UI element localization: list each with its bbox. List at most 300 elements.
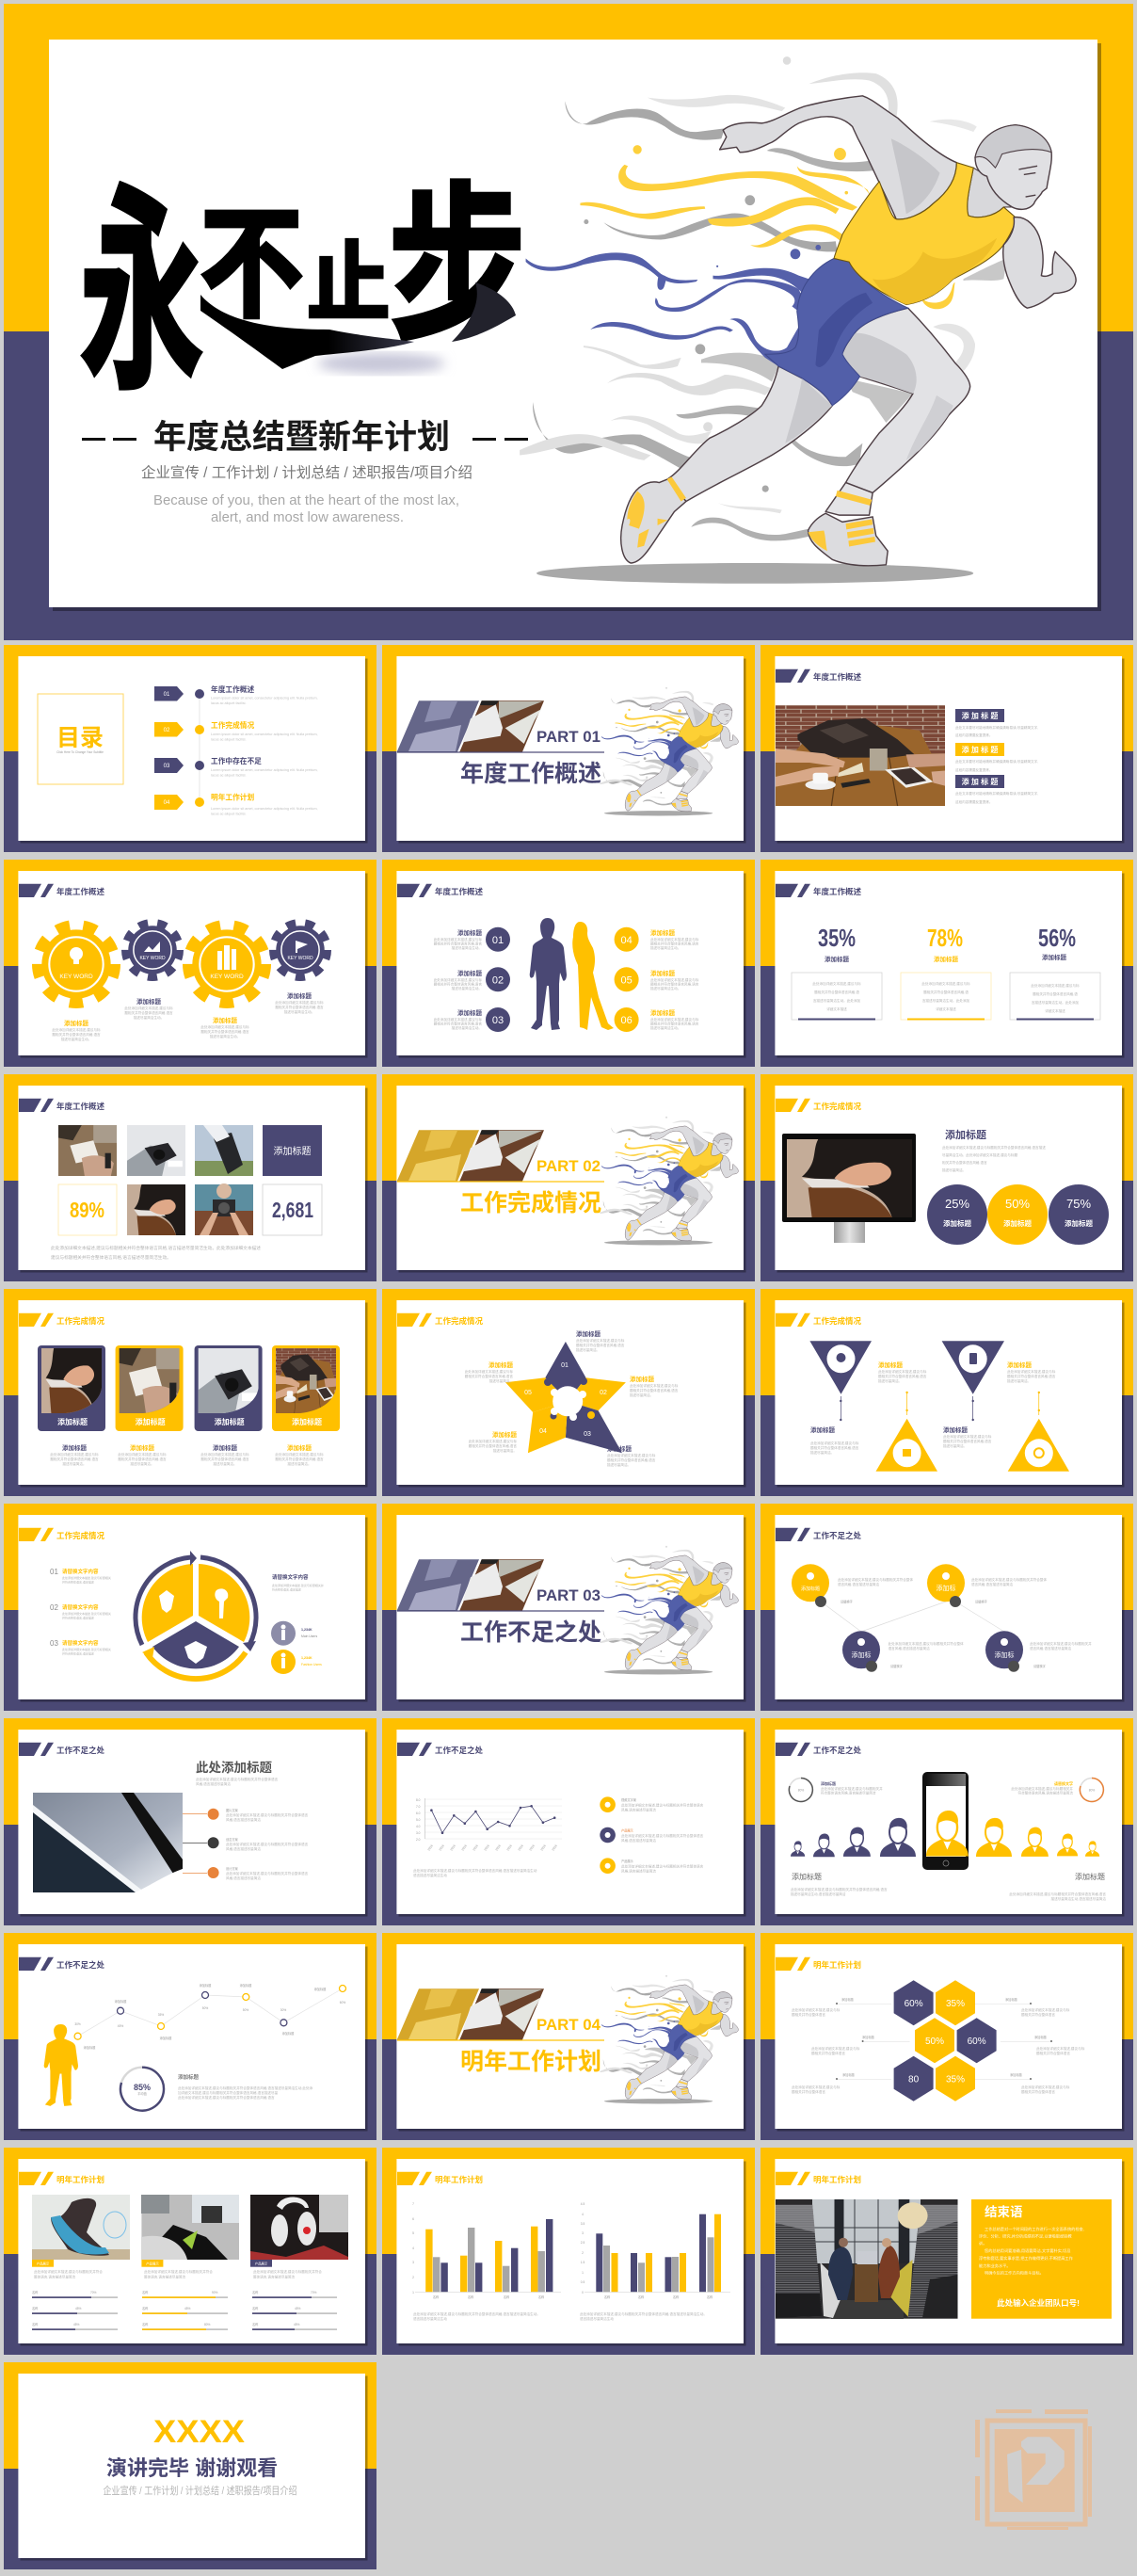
text block: 此处添加详细文本描述,建议与标题相关并符合整体语言风格,语言 <box>178 2095 275 2100</box>
text block: 添加标题 <box>178 2073 200 2081</box>
panel: table of contents <box>4 645 376 852</box>
bar chart left: 名称 <box>468 2294 474 2299</box>
stat 35%: 言描述尽量简洁生动。此处添加 <box>813 998 861 1003</box>
line chart: 4.0 <box>416 1825 421 1828</box>
chart note: 此处添加详细文本描述,建议与标题相关并符合整体语言风格,语言描述尽量简洁生动 <box>413 1868 537 1873</box>
list item 01: 请替换文字内容 <box>62 1568 99 1575</box>
photo: car interior <box>141 2195 239 2260</box>
header tag: 工作不足之处 <box>435 1746 484 1755</box>
label 1: 描述尽量简洁。 <box>576 1347 600 1352</box>
captions: 题相关并符合整体语言风格,语言 <box>118 1457 167 1461</box>
left texts: 添加标题 <box>457 1008 482 1017</box>
label 5: 此处添加详细文本描述,建议与标 <box>465 1369 513 1374</box>
connector lines <box>821 1602 1004 1632</box>
note right: 此处添加详细文本描述,建议与标题相关并符合整体语言风格,语言描述尽量简洁生动。 <box>580 2311 707 2316</box>
photo: headphones <box>250 2195 348 2260</box>
note right: 语言描述尽量简洁生动 <box>580 2316 614 2321</box>
right texts: 添加标题 <box>650 928 676 937</box>
stat: main users <box>271 1621 317 1646</box>
panel: bar charts <box>382 2148 755 2355</box>
section title: 工作完成情况 <box>460 1190 601 1216</box>
photo: sneaker <box>32 2195 130 2260</box>
item 02 <box>154 720 318 742</box>
item 1 text and bars: 产品展示 <box>37 2262 50 2265</box>
line chart: 2016 <box>540 1843 547 1852</box>
left texts: 描述尽量简洁生动。 <box>452 986 482 990</box>
icon: gear with bulb <box>39 926 114 1002</box>
label below gear 4: 题相关并符合整体语言风格,语言 <box>275 1005 324 1009</box>
gauge 85% <box>120 2068 164 2111</box>
tag block 2 <box>955 743 1038 772</box>
label yellow 1: 描述尽量简洁。 <box>878 1378 902 1383</box>
icon: gear with flag: KEY WORD <box>287 956 313 961</box>
item 2 text and bars: 45% <box>184 2307 191 2310</box>
section title: 工作不足之处 <box>460 1618 601 1646</box>
bar chart right: 4.5 <box>581 2202 585 2206</box>
bar chart right: 0.5 <box>581 2280 585 2284</box>
stat 78%: 详细文本描述 <box>936 1006 956 1011</box>
box: 89% stat: 89% <box>70 1198 104 1222</box>
body text: 此处添加详细文本描述,建议与标题相关并符合整体语言 <box>196 1777 279 1781</box>
tag block 1: 添 加 标 题 <box>962 711 998 720</box>
item 3 text and bars: 整体语言,语言描述尽量简洁 <box>253 2275 296 2278</box>
right texts: 此处添加详细文本描述,建议与标 <box>650 977 699 982</box>
tagline: 企业宣传 / 工作计划 / 计划总结 / 述职报告/项目介绍 <box>141 464 472 481</box>
label 3: 此处添加详细文本描述,建议与标 <box>607 1453 656 1457</box>
header tag: 工作完成情况 <box>435 1316 484 1326</box>
item 2 text and bars: 90% <box>212 2291 218 2294</box>
labels right: 添加标题 <box>1010 2072 1023 2077</box>
panel: hexagon cluster <box>761 1933 1133 2140</box>
panel: photo grid <box>4 1074 376 1281</box>
tag block 1 <box>955 709 1038 737</box>
item 1 text and bars: 45% <box>73 2323 80 2326</box>
stat: main users: 1,234K <box>301 1628 312 1632</box>
line chart: 2016 <box>439 1843 445 1852</box>
feature 3 <box>600 1858 704 1874</box>
node 2 <box>927 1564 1047 1607</box>
section photo <box>397 1988 604 2041</box>
header tag <box>397 2172 483 2185</box>
label navy 2: 题相关并符合整体语言风格,语言 <box>943 1439 992 1443</box>
item 04: lacus ac aliquet facilisi. <box>211 812 247 815</box>
circle 50% <box>987 1184 1048 1245</box>
list item 03: 并符合整体语言,语言描述 <box>62 1651 94 1655</box>
header tag: 工作完成情况 <box>56 1316 105 1326</box>
card 3 <box>195 1345 263 1431</box>
tag block 2: 此处文本要尽可能地精练并确保清晰易读,尽量精简文字, <box>955 759 1038 764</box>
note left: 此处添加详细文本描述,建议与标题相关并符合整体语言风格,语言描述尽量简洁生动。 <box>413 2311 540 2316</box>
label yellow 1: 此处添加详细文本描述,建议与标 <box>878 1369 927 1374</box>
tag block 2: 这段内容需要反复提炼。 <box>955 767 993 772</box>
label 5: 描述尽量简洁。 <box>489 1378 513 1383</box>
item 1 text and bars: 名称 <box>32 2290 39 2294</box>
body text: 描述尽量简洁。 <box>942 1167 966 1172</box>
chart: hexagons: 60% <box>905 1999 923 2009</box>
closing card: 您的总结用词要准确,用语要简洁,文字要朴实,切忌 <box>985 2247 1070 2254</box>
label 4: 题相关并符合整体语言风格,语言 <box>469 1443 517 1448</box>
header tag: 年度工作概述 <box>813 672 862 682</box>
label navy 2: 描述尽量简洁。 <box>943 1443 967 1448</box>
feature 2: 产品展示 <box>621 1828 633 1832</box>
item 3 text and bars: 名称 <box>252 2290 259 2294</box>
panel: products with progress bars <box>4 2148 376 2355</box>
text block: 此处添加详细文本描述,建议与标题相关并符合整体语言风格,语言描述尽量简洁生动,此处添 <box>178 2085 313 2090</box>
closing card: 评价、分析、研究,并分析成绩的不足,以便吸取经验教 <box>979 2233 1072 2239</box>
label yellow 1 <box>878 1360 927 1383</box>
card 2 <box>116 1345 184 1431</box>
chart: five piece star puzzle: 01 <box>561 1362 568 1369</box>
right texts: 此处添加详细文本描述,建议与标 <box>650 1017 699 1022</box>
item 3 text and bars <box>250 2260 337 2330</box>
panel: progress steps with man <box>4 1933 376 2140</box>
item 1 text and bars: 名称 <box>32 2322 39 2326</box>
gauge 85%: 平均值 <box>137 2091 148 2096</box>
chart: hexagons: 80 <box>908 2075 920 2085</box>
bar chart right: 2.5 <box>581 2241 585 2245</box>
closing card: 明确今后的工作方向和奋斗目标。 <box>985 2269 1044 2277</box>
label navy 1 <box>810 1425 859 1455</box>
panel: phone with avatars <box>761 1718 1133 1925</box>
stat 35%: 添加标题 <box>825 955 849 963</box>
caption right: 描述尽量简洁生动,语言描述尽量简洁 <box>1050 1896 1106 1901</box>
header tag <box>19 2172 104 2185</box>
brush title: 止 <box>307 235 390 332</box>
list item 2: 创意方案 <box>226 1837 239 1842</box>
label navy 2 <box>943 1425 992 1448</box>
section photo <box>397 1559 604 1612</box>
list item 1: 风格,语言描述尽量简洁 <box>226 1817 261 1822</box>
captions: 此处添加详细文本描述,建议与标 <box>118 1452 167 1457</box>
gauge right: 80% <box>1089 1789 1095 1793</box>
item 04: 04 <box>164 800 170 806</box>
labels left <box>792 1997 875 2094</box>
bar chart left: 7 <box>412 2202 414 2206</box>
gauge left <box>789 1778 813 1802</box>
label below gear 2: 题相关并符合整体语言风格,语言 <box>124 1010 173 1015</box>
bar chart left: 名称 <box>538 2294 545 2299</box>
item 1 text and bars: 整体语言,语言描述尽量简洁 <box>34 2275 76 2278</box>
node 2: 此处添加详细文本描述,建议与标题相关并符合整体 <box>971 1577 1047 1582</box>
chart: stepped line: 添加标题 <box>314 1987 327 1991</box>
tag block 3: 此处文本要尽可能地精练并确保清晰易读,尽量精简文字, <box>955 791 1038 796</box>
item 2 text and bars: 名称 <box>142 2306 149 2310</box>
panel: thank you slide <box>4 2362 376 2569</box>
box: 89% stat <box>58 1184 117 1235</box>
number circles: 03 <box>492 1015 504 1026</box>
body text <box>51 1245 261 1261</box>
line chart: 2016 <box>552 1843 558 1852</box>
captions: 描述尽量简洁。 <box>130 1461 154 1466</box>
number circles: 01 <box>492 935 504 946</box>
illustration: runner <box>600 1117 738 1245</box>
header tag <box>776 1528 862 1541</box>
panel: part 02 divider <box>382 1074 755 1281</box>
captions: 题相关并符合整体语言风格,语言 <box>200 1457 249 1461</box>
chart: five piece star puzzle: 03 <box>584 1431 591 1438</box>
label yellow 2: 此处添加详细文本描述,建议与标 <box>1007 1369 1056 1374</box>
right texts: 添加标题 <box>650 1008 676 1017</box>
node 1: 语言风格,语言描述尽量简洁 <box>838 1582 880 1586</box>
captions: 添加标题 <box>62 1443 87 1452</box>
labels left: 添加标题 <box>842 2072 856 2077</box>
item 3 text and bars: 产品展示 <box>255 2262 268 2265</box>
item 03: lacus ac aliquet facilisi. <box>211 774 247 778</box>
label below gear 3: 描述尽量简洁生动。 <box>210 1034 240 1038</box>
right texts: 添加标题 <box>650 969 676 977</box>
part label: PART 01 <box>536 729 601 746</box>
line chart: 2016 <box>450 1843 456 1852</box>
captions: 此处添加详细文本描述,建议与标 <box>50 1452 99 1457</box>
line chart: 2016 <box>427 1843 434 1852</box>
chart: stepped line: 30% <box>74 2022 81 2026</box>
list item 2 <box>183 1837 309 1851</box>
slide heading: 添加标题 <box>945 1128 986 1141</box>
label yellow 2: 添加标题 <box>1007 1360 1032 1369</box>
header tag <box>397 1743 484 1756</box>
panel: four linked nodes <box>761 1504 1133 1711</box>
body text: 相关并符合整体语言风格,语言 <box>942 1160 987 1165</box>
text right: 此处添加详细文本描述,建议与标题相关并 <box>1011 1786 1073 1791</box>
header tag: 工作不足之处 <box>813 1746 862 1755</box>
header tag <box>776 1743 862 1756</box>
item 1 text and bars <box>32 2260 118 2330</box>
icon: down triangle 2 <box>942 1341 1004 1421</box>
item 02: lacus ac aliquet facilisi. <box>211 738 247 742</box>
chart: stepped line: 添加标题 <box>200 1983 212 1988</box>
thank you message: 演讲完毕 谢谢观看 <box>106 2456 278 2480</box>
avatars yellow <box>926 1811 1099 1857</box>
line chart: 8.0 <box>416 1798 421 1802</box>
stat: fashion users <box>271 1650 322 1674</box>
label 2 <box>630 1375 679 1397</box>
text block <box>178 2073 313 2100</box>
brush title: 永 <box>79 171 204 416</box>
item 3 text and bars: 45% <box>294 2323 300 2326</box>
icon: man silhouette <box>44 2024 78 2106</box>
gauge right <box>1080 1778 1103 1802</box>
timeline line <box>199 692 200 803</box>
illustration: runner <box>600 1546 738 1674</box>
item 01 <box>154 684 318 705</box>
connectors <box>836 2003 1052 2080</box>
labels right: 题相关并符合整体语言 <box>1021 2089 1055 2094</box>
label 3: 添加标题 <box>607 1444 633 1453</box>
part label: PART 03 <box>536 1587 601 1604</box>
brush tail stroke <box>452 282 516 342</box>
header tag <box>19 1528 105 1541</box>
item 1 text and bars: 45% <box>75 2307 82 2310</box>
labels right: 题相关并符合整体语言 <box>1036 2051 1070 2055</box>
header tag <box>776 1957 861 1971</box>
slide heading: 此处添加标题 <box>196 1760 272 1775</box>
brush title <box>79 171 526 416</box>
bar chart right: 2 <box>582 2251 584 2255</box>
feature 3: 此处添加详细文本描述,建议与标题相关并符合整体语言 <box>621 1864 704 1868</box>
chart: stepped line: 50% <box>243 2008 248 2012</box>
right texts: 题相关并符合整体语言风格,语言 <box>650 1021 699 1026</box>
label below gear 4 <box>275 991 324 1014</box>
note left <box>413 2311 540 2321</box>
bar chart left: 名称 <box>433 2294 440 2299</box>
english description: Because of you, then at the heart of the most lax, <box>153 492 459 508</box>
panel: four photo cards <box>4 1289 376 1496</box>
stat 56%: 添加标题 <box>1042 953 1067 961</box>
section title: 年度工作概述 <box>460 761 601 787</box>
line chart: 2016 <box>484 1843 490 1852</box>
labels right: 题相关并符合整体语言 <box>1021 2012 1055 2017</box>
item 2 text and bars: 此处添加详细文本描述,建议与标题相关并符合 <box>144 2269 213 2274</box>
labels left: 添加标题 <box>841 1997 855 2002</box>
item 3 text and bars: 名称 <box>252 2306 259 2310</box>
chart: stepped line: 45% <box>118 2024 123 2028</box>
chart: five piece star puzzle: 02 <box>600 1390 607 1396</box>
header tag <box>19 1313 105 1327</box>
right texts: 题相关并符合整体语言风格,语言 <box>650 942 699 945</box>
photo: person with camera <box>195 1183 253 1235</box>
label 4: 此处添加详细文本描述,建议与标 <box>469 1439 517 1443</box>
bar chart left: 名称 <box>504 2294 510 2299</box>
node 2: 请替换字 <box>975 1599 987 1604</box>
bar chart right: 0 <box>582 2291 584 2294</box>
number circles: 04 <box>620 935 633 946</box>
chart: stepped line: 添加标题 <box>84 2045 96 2050</box>
circle 75%: 添加标题 <box>1065 1218 1093 1228</box>
section photo <box>397 1130 604 1183</box>
icon: man silhouette <box>530 918 567 1030</box>
label below gear 2 <box>124 997 173 1020</box>
stat 35%: 详细文本描述 <box>826 1006 847 1011</box>
label 1 <box>576 1329 625 1352</box>
list item 3: 此处添加详细文本描述,建议与标题相关并符合整体语言 <box>226 1871 309 1876</box>
panel: monitor and circles <box>761 1074 1133 1281</box>
bar chart right: 名称 <box>673 2294 680 2299</box>
stat 35% <box>792 924 882 1021</box>
list item 01: 01 <box>50 1568 58 1576</box>
bar chart left: 5 <box>412 2231 414 2235</box>
label 4: 描述尽量简洁。 <box>493 1448 517 1453</box>
text left: 添加标题 <box>821 1780 836 1786</box>
node 4: 此处添加详细文本描述,建议与标题相关并 <box>1030 1641 1092 1646</box>
icon: gear with bulb: KEY WORD <box>59 974 93 980</box>
chart: stepped line: 添加标题 <box>240 1983 252 1988</box>
label below gear 2: 此处添加详细文本描述,建议与标 <box>124 1006 173 1010</box>
label yellow 1: 添加标题 <box>878 1360 904 1369</box>
node 2: 语言风格,语言描述尽量简洁 <box>971 1582 1014 1586</box>
labels right: 添加标题 <box>1005 1997 1018 2002</box>
label below gear 3: 此处添加详细文本描述,建议与标 <box>200 1024 249 1029</box>
list item 3: 设计方案 <box>226 1866 239 1871</box>
stat 78%: 题相关并符合整体语言风格,语 <box>923 990 969 994</box>
label 2: 此处添加详细文本描述,建议与标 <box>630 1383 679 1388</box>
list item 3 <box>183 1866 309 1880</box>
stat 78% <box>901 924 991 1021</box>
panel: laptop photo with list <box>4 1718 376 1925</box>
label below gear 1: 添加标题 <box>64 1019 88 1027</box>
captions: 添加标题 <box>287 1443 312 1452</box>
bar chart right: 名称 <box>707 2294 713 2299</box>
header tag <box>776 1313 862 1327</box>
line chart: 2.0 <box>416 1838 421 1842</box>
label yellow 2: 题相关并符合整体语言风格,语言 <box>1007 1374 1056 1378</box>
label 2: 描述尽量简洁。 <box>630 1393 653 1397</box>
panel: hero cover slide <box>4 4 1133 640</box>
number circles <box>486 927 639 1032</box>
illustration: runner <box>600 1975 738 2103</box>
label 3: 描述尽量简洁。 <box>607 1462 631 1467</box>
circle 25%: 添加标题 <box>943 1218 971 1228</box>
item 03 <box>154 756 318 778</box>
label navy 1: 添加标题 <box>810 1425 836 1434</box>
panel: line chart <box>382 1718 755 1925</box>
item 3 text and bars: 名称 <box>252 2322 259 2326</box>
header tag <box>776 1099 862 1112</box>
left texts: 此处添加详细文本描述,建议与标 <box>434 1017 482 1022</box>
feature 1: 此处添加详细文本描述,建议与标题相关并符合整体语言 <box>621 1802 704 1808</box>
note right <box>580 2311 707 2321</box>
list item 1: 图片文案 <box>226 1808 239 1812</box>
contents title box <box>38 694 123 784</box>
panel: closing remarks <box>761 2148 1133 2355</box>
closing card: 能力和业务水平。 <box>979 2262 1011 2269</box>
stat 78%: 言描述尽量简洁生动。此处添加 <box>922 998 970 1003</box>
item 01: 01 <box>164 692 170 698</box>
label below gear 1: 此处添加详细文本描述,建议与标 <box>52 1027 101 1032</box>
bar chart right: 3 <box>582 2231 584 2235</box>
label below gear 2: 添加标题 <box>136 997 162 1006</box>
text right <box>1011 1780 1073 1795</box>
chart: stepped line: 50% <box>202 2006 208 2010</box>
icon: brush ink wash <box>317 353 445 374</box>
label 3 <box>607 1444 656 1467</box>
item 04: Lorem ipsum dolor sit amet, consectetur adipiscing elit. Nulla pretium, <box>211 807 318 811</box>
right texts: 题相关并符合整体语言风格,语言 <box>650 981 699 987</box>
stat: main users: Main Users <box>301 1634 317 1638</box>
node 4: 语言风格,语言描述尽量简洁 <box>1030 1646 1072 1650</box>
label navy 2: 此处添加详细文本描述,建议与标 <box>943 1434 992 1439</box>
line chart: 7.0 <box>416 1805 421 1809</box>
item 3 text and bars: 此处添加详细文本描述,建议与标题相关并符合 <box>253 2269 322 2274</box>
icon: gear with buildings <box>189 926 264 1002</box>
item 01: lacus ac aliquet facilisi. <box>211 701 247 705</box>
illustration: runner <box>600 687 738 815</box>
line chart: 2016 <box>518 1843 524 1852</box>
icon: stamp watermark <box>975 2409 1092 2530</box>
chart: hexagons: 35% <box>946 2075 965 2085</box>
feature 1: 视频文字案 <box>621 1797 637 1802</box>
label below gear 4: 添加标题 <box>287 991 312 1000</box>
icon: gear with buildings: KEY WORD <box>210 974 244 980</box>
icon: woman silhouette <box>572 922 614 1030</box>
left texts: 题相关并符合整体语言风格,语言 <box>434 1021 482 1026</box>
icon: gear with chart: KEY WORD <box>139 956 166 961</box>
node 3: 添加标 <box>851 1650 872 1659</box>
circle 75%: 75% <box>1066 1197 1091 1211</box>
labels right: 添加标题 <box>1034 2035 1048 2039</box>
card 3: 添加标题 <box>215 1417 245 1426</box>
body text: 此处添加详细文本描述,建议与标题相关并符合整体语言风格,语言描述尽量简洁生动。此处添加详细文本描述 <box>51 1245 261 1251</box>
label 4 <box>469 1430 518 1453</box>
item 01: 年度工作概述 <box>211 684 254 694</box>
stat: fashion users: 1,234K <box>301 1656 312 1660</box>
panel: gears with keywords <box>4 860 376 1067</box>
contents title box: Click Here To Change Your Subtitle <box>56 750 104 754</box>
left texts: 此处添加详细文本描述,建议与标 <box>434 937 482 942</box>
node 3: 语言风格,语言描述尽量简洁 <box>889 1646 930 1650</box>
panel: part 04 divider <box>382 1933 755 2140</box>
header tag <box>19 1957 105 1971</box>
panel: people silhouettes with six points <box>382 860 755 1067</box>
